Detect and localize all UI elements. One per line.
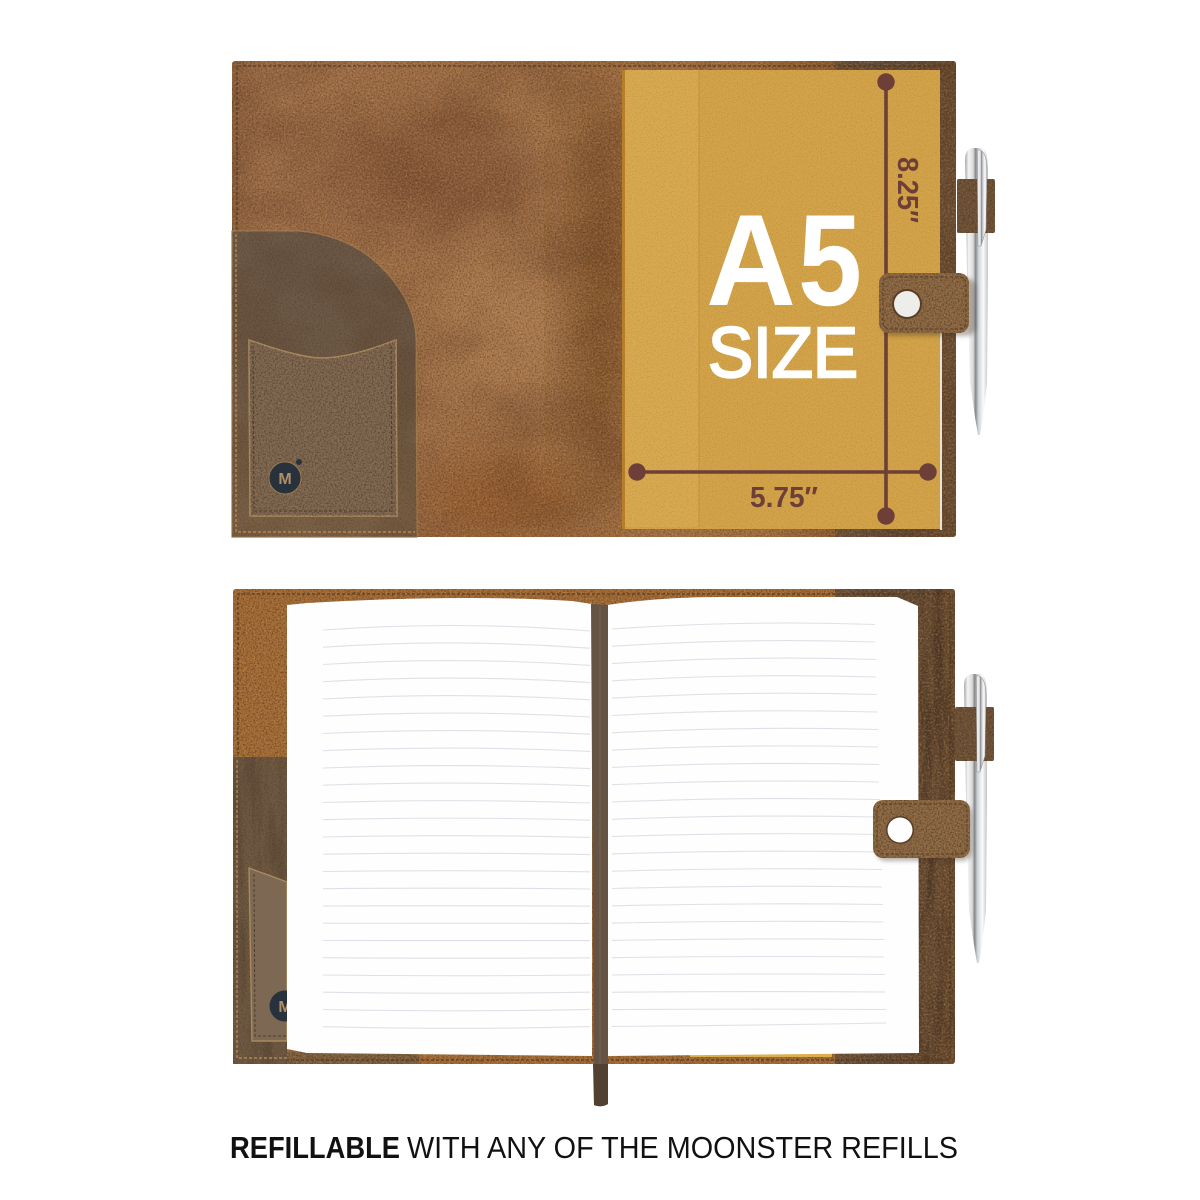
width dimension line [628, 463, 937, 514]
icon: brand logo: M [278, 471, 292, 488]
pen with loop [955, 674, 994, 963]
panel: open cover with A5 refill [232, 61, 995, 545]
closure strap with snap [873, 800, 972, 861]
A5 size label: A [706, 187, 796, 333]
A5 size label: 5 [798, 187, 862, 333]
notebook left page [287, 598, 592, 1056]
height dimension line: 8.25″ [891, 157, 923, 223]
cover leather base [233, 589, 955, 1064]
closure strap with snap [879, 273, 976, 336]
inside cover leather [232, 61, 956, 545]
icon: brand logo [269, 459, 302, 494]
front card pocket [248, 339, 398, 517]
caption: REFILLABLE [230, 1130, 400, 1165]
panel: cover with ruled notebook [233, 589, 994, 1106]
A5 size label [706, 187, 862, 393]
back pocket [232, 231, 417, 537]
pen with loop [957, 148, 995, 435]
caption: WITH ANY OF THE MOONSTER REFILLS [407, 1130, 958, 1165]
card pocket visible edge [249, 868, 287, 1041]
kraft A5 refill [622, 70, 942, 530]
ribbon bookmark [591, 604, 608, 1106]
A5 size label: SIZE [708, 314, 858, 393]
width dimension line: 5.75″ [750, 482, 818, 514]
kraft refill edge [690, 1050, 832, 1057]
back pocket visible edge [233, 757, 287, 1064]
icon: logo partly hidden [270, 990, 300, 1022]
right page ruled lines [612, 623, 886, 1026]
left page ruled lines [323, 625, 590, 1028]
height dimension line [877, 73, 923, 525]
icon: logo partly hidden: M [278, 999, 292, 1016]
notebook right page [607, 597, 919, 1056]
